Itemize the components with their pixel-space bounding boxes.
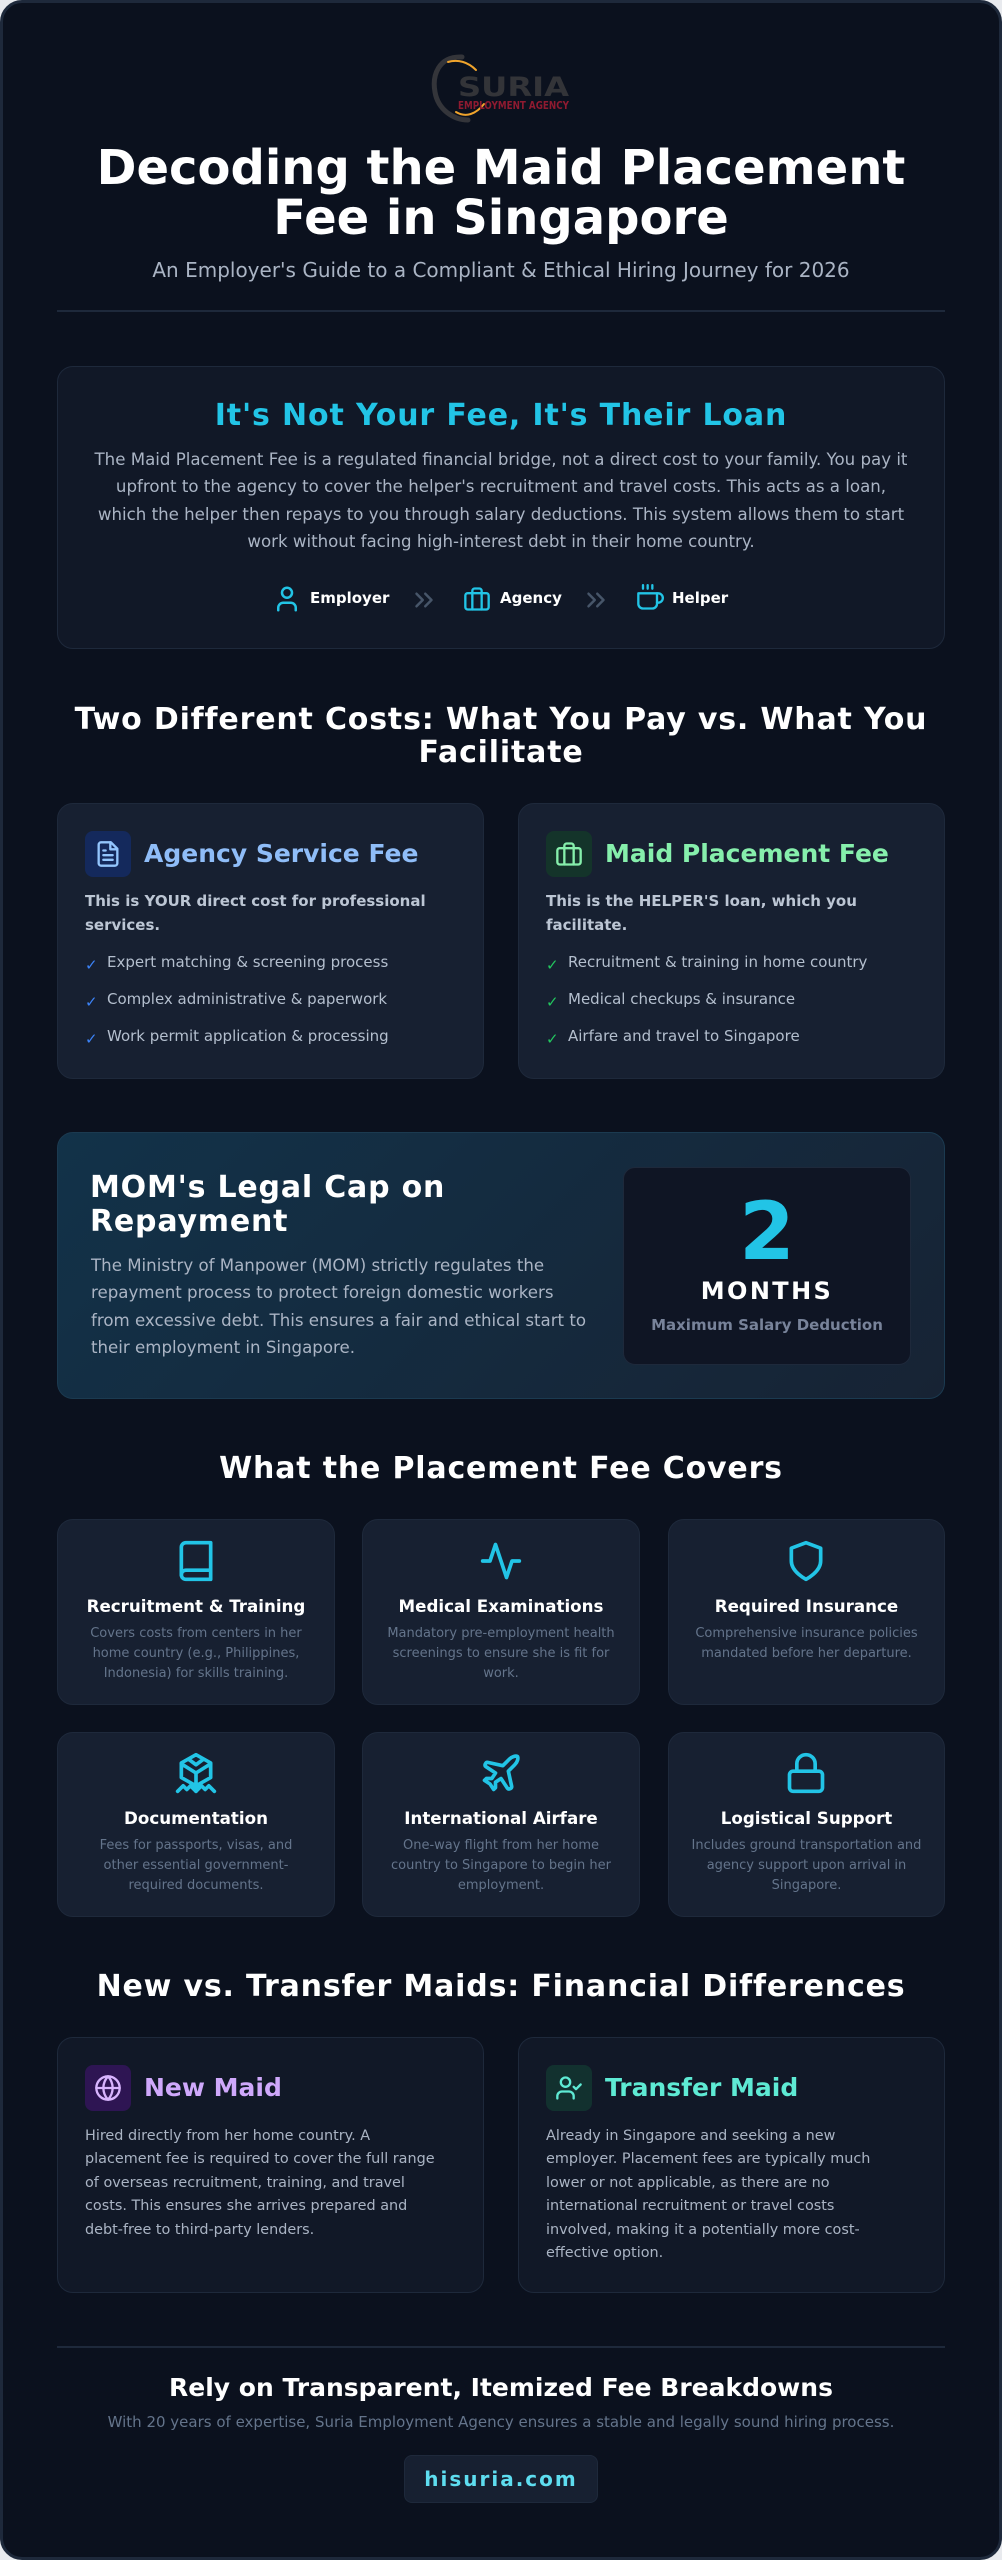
description: Mandatory pre-employment health <box>387 1626 615 1641</box>
panel: medical <box>362 1519 640 1705</box>
description: Includes ground transportation and <box>692 1838 921 1853</box>
description: work. <box>483 1666 519 1681</box>
heading: two different costs <box>74 702 927 770</box>
flow: employer agency helper <box>277 584 728 612</box>
website button <box>404 2455 598 2503</box>
icon: package <box>176 1752 216 1794</box>
description: Covers costs from centers in her <box>90 1626 302 1641</box>
heading: new vs transfer: New vs. Transfer Maids: Financial Differences <box>97 1969 905 2004</box>
icon: globe <box>85 2065 131 2111</box>
description: Fees for passports, visas, and <box>100 1838 292 1853</box>
title: Logistical Support <box>721 1808 892 1828</box>
description: screenings to ensure she is fit for <box>393 1646 609 1661</box>
body text: international recruitment or travel costs <box>546 2198 834 2214</box>
panel: airfare <box>362 1732 640 1917</box>
panel: insurance <box>668 1519 945 1705</box>
body text: costs. This ensures she arrives prepared and <box>85 2198 407 2214</box>
website button: hisuria.com <box>424 2467 578 2491</box>
title: Fee in Singapore <box>273 190 729 246</box>
body text: their employment in Singapore. <box>91 1338 355 1357</box>
panel: recruitment <box>57 1519 335 1705</box>
description: required documents. <box>128 1878 264 1893</box>
arrow <box>587 592 605 608</box>
description <box>387 1626 615 1681</box>
description: Singapore. <box>772 1878 841 1893</box>
description: home country (e.g., Philippines, <box>93 1646 299 1661</box>
lead text: This is the HELPER'S loan, which you <box>546 892 857 910</box>
panel: transfer maid <box>518 2037 945 2293</box>
body text: The Ministry of Manpower (MOM) strictly regulates the <box>91 1256 544 1275</box>
logo <box>432 54 570 122</box>
body text: Already in Singapore and seeking a new <box>546 2128 835 2144</box>
checklist: ✓ <box>546 993 559 1011</box>
heading: Transfer Maid <box>605 2073 798 2102</box>
heading: what the fee covers: What the Placement Fee Covers <box>219 1451 783 1486</box>
lead text: This is YOUR direct cost for professional <box>85 892 426 910</box>
panel: agency service fee <box>57 803 484 1079</box>
checklist: Medical checkups & insurance <box>568 990 795 1008</box>
label: helper: Helper <box>672 589 728 607</box>
body text: effective option. <box>546 2245 663 2261</box>
icon: agency <box>464 587 490 611</box>
checklist: ✓ <box>85 956 98 974</box>
body text: from excessive debt. This ensures a fair and ethical start to <box>91 1311 586 1330</box>
icon: briefcase <box>546 831 592 877</box>
stat number: 2 <box>739 1185 795 1278</box>
subtitle: An Employer's Guide to a Compliant & Ethical Hiring Journey for 2026 <box>152 258 850 282</box>
panel: its their loan <box>57 366 945 649</box>
description <box>100 1838 292 1893</box>
title: International Airfare <box>404 1808 598 1828</box>
body text: lower or not applicable, as there are no <box>546 2175 830 2191</box>
panel: documentation <box>57 1732 335 1917</box>
heading <box>90 1170 445 1238</box>
title: Medical Examinations <box>399 1596 603 1616</box>
description: country to Singapore to begin her <box>391 1858 611 1873</box>
heading: two different costs: Two Different Costs: What You Pay vs. What You <box>75 702 927 737</box>
icon: lock <box>788 1752 824 1794</box>
lead text: services. <box>85 916 160 934</box>
body text: repayment process to protect foreign domestic workers <box>91 1283 554 1302</box>
title: Documentation <box>124 1808 268 1828</box>
arrow <box>415 592 433 608</box>
icon: helper <box>637 584 664 610</box>
checklist: ✓ <box>546 1030 559 1048</box>
body text: work without facing high-interest debt in their home country. <box>247 532 755 551</box>
body text <box>90 1256 586 1357</box>
body text: Hired directly from her home country. A <box>85 2128 370 2144</box>
description: Indonesia) for skills training. <box>104 1666 288 1681</box>
icon: document <box>85 831 131 877</box>
body text: involved, making it a potentially more cost- <box>546 2222 860 2238</box>
label: agency: Agency <box>500 589 562 607</box>
body text <box>94 450 907 551</box>
checklist: Expert matching & screening process <box>107 953 388 971</box>
body text: upfront to the agency to cover the helper's recruitment and travel costs. This acts as a loan, <box>116 477 886 496</box>
icon: shield <box>790 1540 822 1582</box>
body text: debt-free to third-party lenders. <box>85 2222 314 2238</box>
checklist: Complex administrative & paperwork <box>107 990 387 1008</box>
body text: which the helper then repays to you through salary deductions. This system allows them to start <box>98 505 904 524</box>
heading: two different costs: Facilitate <box>418 735 584 770</box>
description <box>695 1626 918 1661</box>
body text: of overseas recruitment, training, and travel <box>85 2175 405 2191</box>
heading: Agency Service Fee <box>144 839 418 868</box>
footer text: With 20 years of expertise, Suria Employment Agency ensures a stable and legally sound hiring process. <box>108 2413 894 2431</box>
icon: activity <box>480 1542 522 1580</box>
checklist: Work permit application & processing <box>107 1027 389 1045</box>
body text <box>85 2128 435 2238</box>
heading: It's Not Your Fee, It's Their Loan <box>215 398 787 433</box>
icon: plane <box>482 1754 520 1792</box>
description: mandated before her departure. <box>701 1646 912 1661</box>
lead text <box>85 892 426 934</box>
body text: The Maid Placement Fee is a regulated financial bridge, not a direct cost to your family. You pay it <box>95 450 907 469</box>
stat unit: MONTHS <box>701 1277 833 1305</box>
panel: maid placement fee <box>518 803 945 1079</box>
title: Required Insurance <box>715 1596 898 1616</box>
title: Recruitment & Training <box>87 1596 305 1616</box>
body text: employer. Placement fees are typically much <box>546 2151 870 2167</box>
logo: SURIA <box>458 72 569 103</box>
description: agency support upon arrival in <box>707 1858 906 1873</box>
checklist: Recruitment & training in home country <box>568 953 867 971</box>
title <box>97 140 905 246</box>
icon: user check <box>546 2065 592 2111</box>
checklist <box>85 953 389 1048</box>
icon: book <box>180 1540 212 1582</box>
panel: logistics <box>668 1732 945 1917</box>
heading: Repayment <box>90 1204 288 1238</box>
description: One-way flight from her home <box>403 1838 599 1853</box>
body text <box>546 2128 870 2261</box>
checklist: ✓ <box>85 1030 98 1048</box>
checklist: ✓ <box>85 993 98 1011</box>
checklist <box>546 953 867 1048</box>
checklist: Airfare and travel to Singapore <box>568 1027 800 1045</box>
description: employment. <box>458 1878 544 1893</box>
description: Comprehensive insurance policies <box>695 1626 918 1641</box>
stat box <box>623 1167 911 1365</box>
title: Decoding the Maid Placement <box>97 140 905 196</box>
heading: Maid Placement Fee <box>605 839 889 868</box>
heading: MOM's Legal Cap on <box>90 1170 445 1205</box>
description <box>90 1626 302 1681</box>
footer heading: Rely on Transparent, Itemized Fee Breakdowns <box>169 2373 833 2402</box>
description <box>391 1838 611 1893</box>
panel: MOM legal cap <box>57 1132 945 1399</box>
panel: new maid <box>57 2037 484 2293</box>
lead text <box>546 892 857 934</box>
label: employer: Employer <box>310 589 389 607</box>
stat caption: Maximum Salary Deduction <box>651 1316 883 1334</box>
checklist: ✓ <box>546 956 559 974</box>
lead text: facilitate. <box>546 916 627 934</box>
icon: employer <box>277 586 297 612</box>
description <box>692 1838 921 1893</box>
heading: New Maid <box>144 2073 282 2102</box>
body text: placement fee is required to cover the full range <box>85 2151 435 2167</box>
description: other essential government- <box>104 1858 288 1873</box>
